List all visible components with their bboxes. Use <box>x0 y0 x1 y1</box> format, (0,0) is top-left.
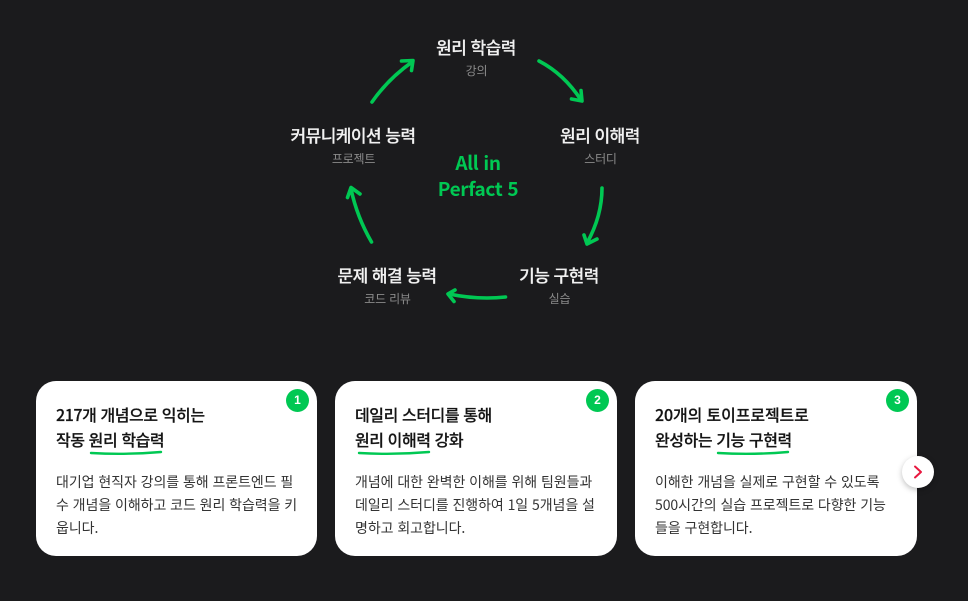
card 3 body: 들을 구현합니다. <box>655 518 752 538</box>
card 3 heading <box>655 402 809 451</box>
node: learning: 원리 학습력 <box>436 34 516 59</box>
card 2 body: 명하고 회고합니다. <box>355 518 465 538</box>
card 1 body: 대기업 현직자 강의를 통해 프론트엔드 필 <box>56 472 293 492</box>
card 1 body <box>56 472 297 538</box>
number badge 3: 3 <box>894 393 901 407</box>
card 1 body: 웁니다. <box>56 518 98 538</box>
next button <box>902 456 934 488</box>
card 1 heading: 작동 원리 학습력 <box>56 427 164 451</box>
card 3 heading: 20개의 토이프로젝트로 <box>655 402 809 426</box>
node: communication <box>291 122 415 167</box>
center title <box>438 149 518 202</box>
panel: card 3 <box>635 381 917 556</box>
node: learning: 강의 <box>466 62 487 79</box>
arrow: communication to learning <box>372 60 413 102</box>
number badge 2: 2 <box>594 393 601 407</box>
panel: card 1 <box>36 381 317 556</box>
card 1 heading <box>56 402 205 451</box>
icon: chevron <box>914 466 922 478</box>
node: understanding: 스터디 <box>584 150 617 167</box>
card 3 body: 이해한 개념을 실제로 구현할 수 있도록 <box>655 472 879 492</box>
card 2 heading: 데일리 스터디를 통해 <box>355 402 492 426</box>
card 2 heading: 원리 이해력 강화 <box>355 427 463 451</box>
card 2 body: 개념에 대한 완벽한 이해를 위해 팀원들과 <box>355 472 592 492</box>
card 2 heading <box>355 402 492 451</box>
number badge 3 <box>886 389 909 412</box>
center title: All in <box>455 149 501 176</box>
card 1 heading: 217개 개념으로 익히는 <box>56 402 205 426</box>
center title: Perfact 5 <box>438 175 518 202</box>
node: communication: 프로젝트 <box>332 150 375 167</box>
arrow: learning to understanding <box>539 61 582 101</box>
node: problem solving: 코드 리뷰 <box>364 290 411 307</box>
number badge 1 <box>286 389 309 412</box>
panel: card 2 <box>335 381 617 556</box>
node: implementation: 실습 <box>549 290 570 307</box>
node: implementation <box>519 262 599 307</box>
card 1 underline <box>90 450 162 455</box>
node: understanding: 원리 이해력 <box>560 122 640 147</box>
node: learning <box>436 34 516 79</box>
card 3 underline <box>716 450 790 455</box>
node: implementation: 기능 구현력 <box>519 262 599 287</box>
card 2 body <box>355 472 595 538</box>
card 1 body: 수 개념을 이해하고 코드 원리 학습력을 키 <box>56 495 297 515</box>
arrow: problem solving to communication <box>348 188 372 242</box>
card 2 body: 데일리 스터디를 진행하여 1일 5개념을 설 <box>355 495 595 515</box>
node: problem solving <box>338 262 436 307</box>
number badge 1: 1 <box>294 393 301 407</box>
card 2 underline <box>358 450 430 455</box>
node: communication: 커뮤니케이션 능력 <box>291 122 415 147</box>
node: understanding <box>560 122 640 167</box>
card 3 heading: 완성하는 기능 구현력 <box>655 427 792 451</box>
node: problem solving: 문제 해결 능력 <box>338 262 436 287</box>
arrow: implementation to problem solving <box>448 290 506 302</box>
arrow: understanding to implementation <box>584 188 602 244</box>
card 3 body <box>655 472 886 538</box>
card 3 body: 500시간의 실습 프로젝트로 다향한 기능 <box>655 495 886 515</box>
number badge 2 <box>586 389 609 412</box>
